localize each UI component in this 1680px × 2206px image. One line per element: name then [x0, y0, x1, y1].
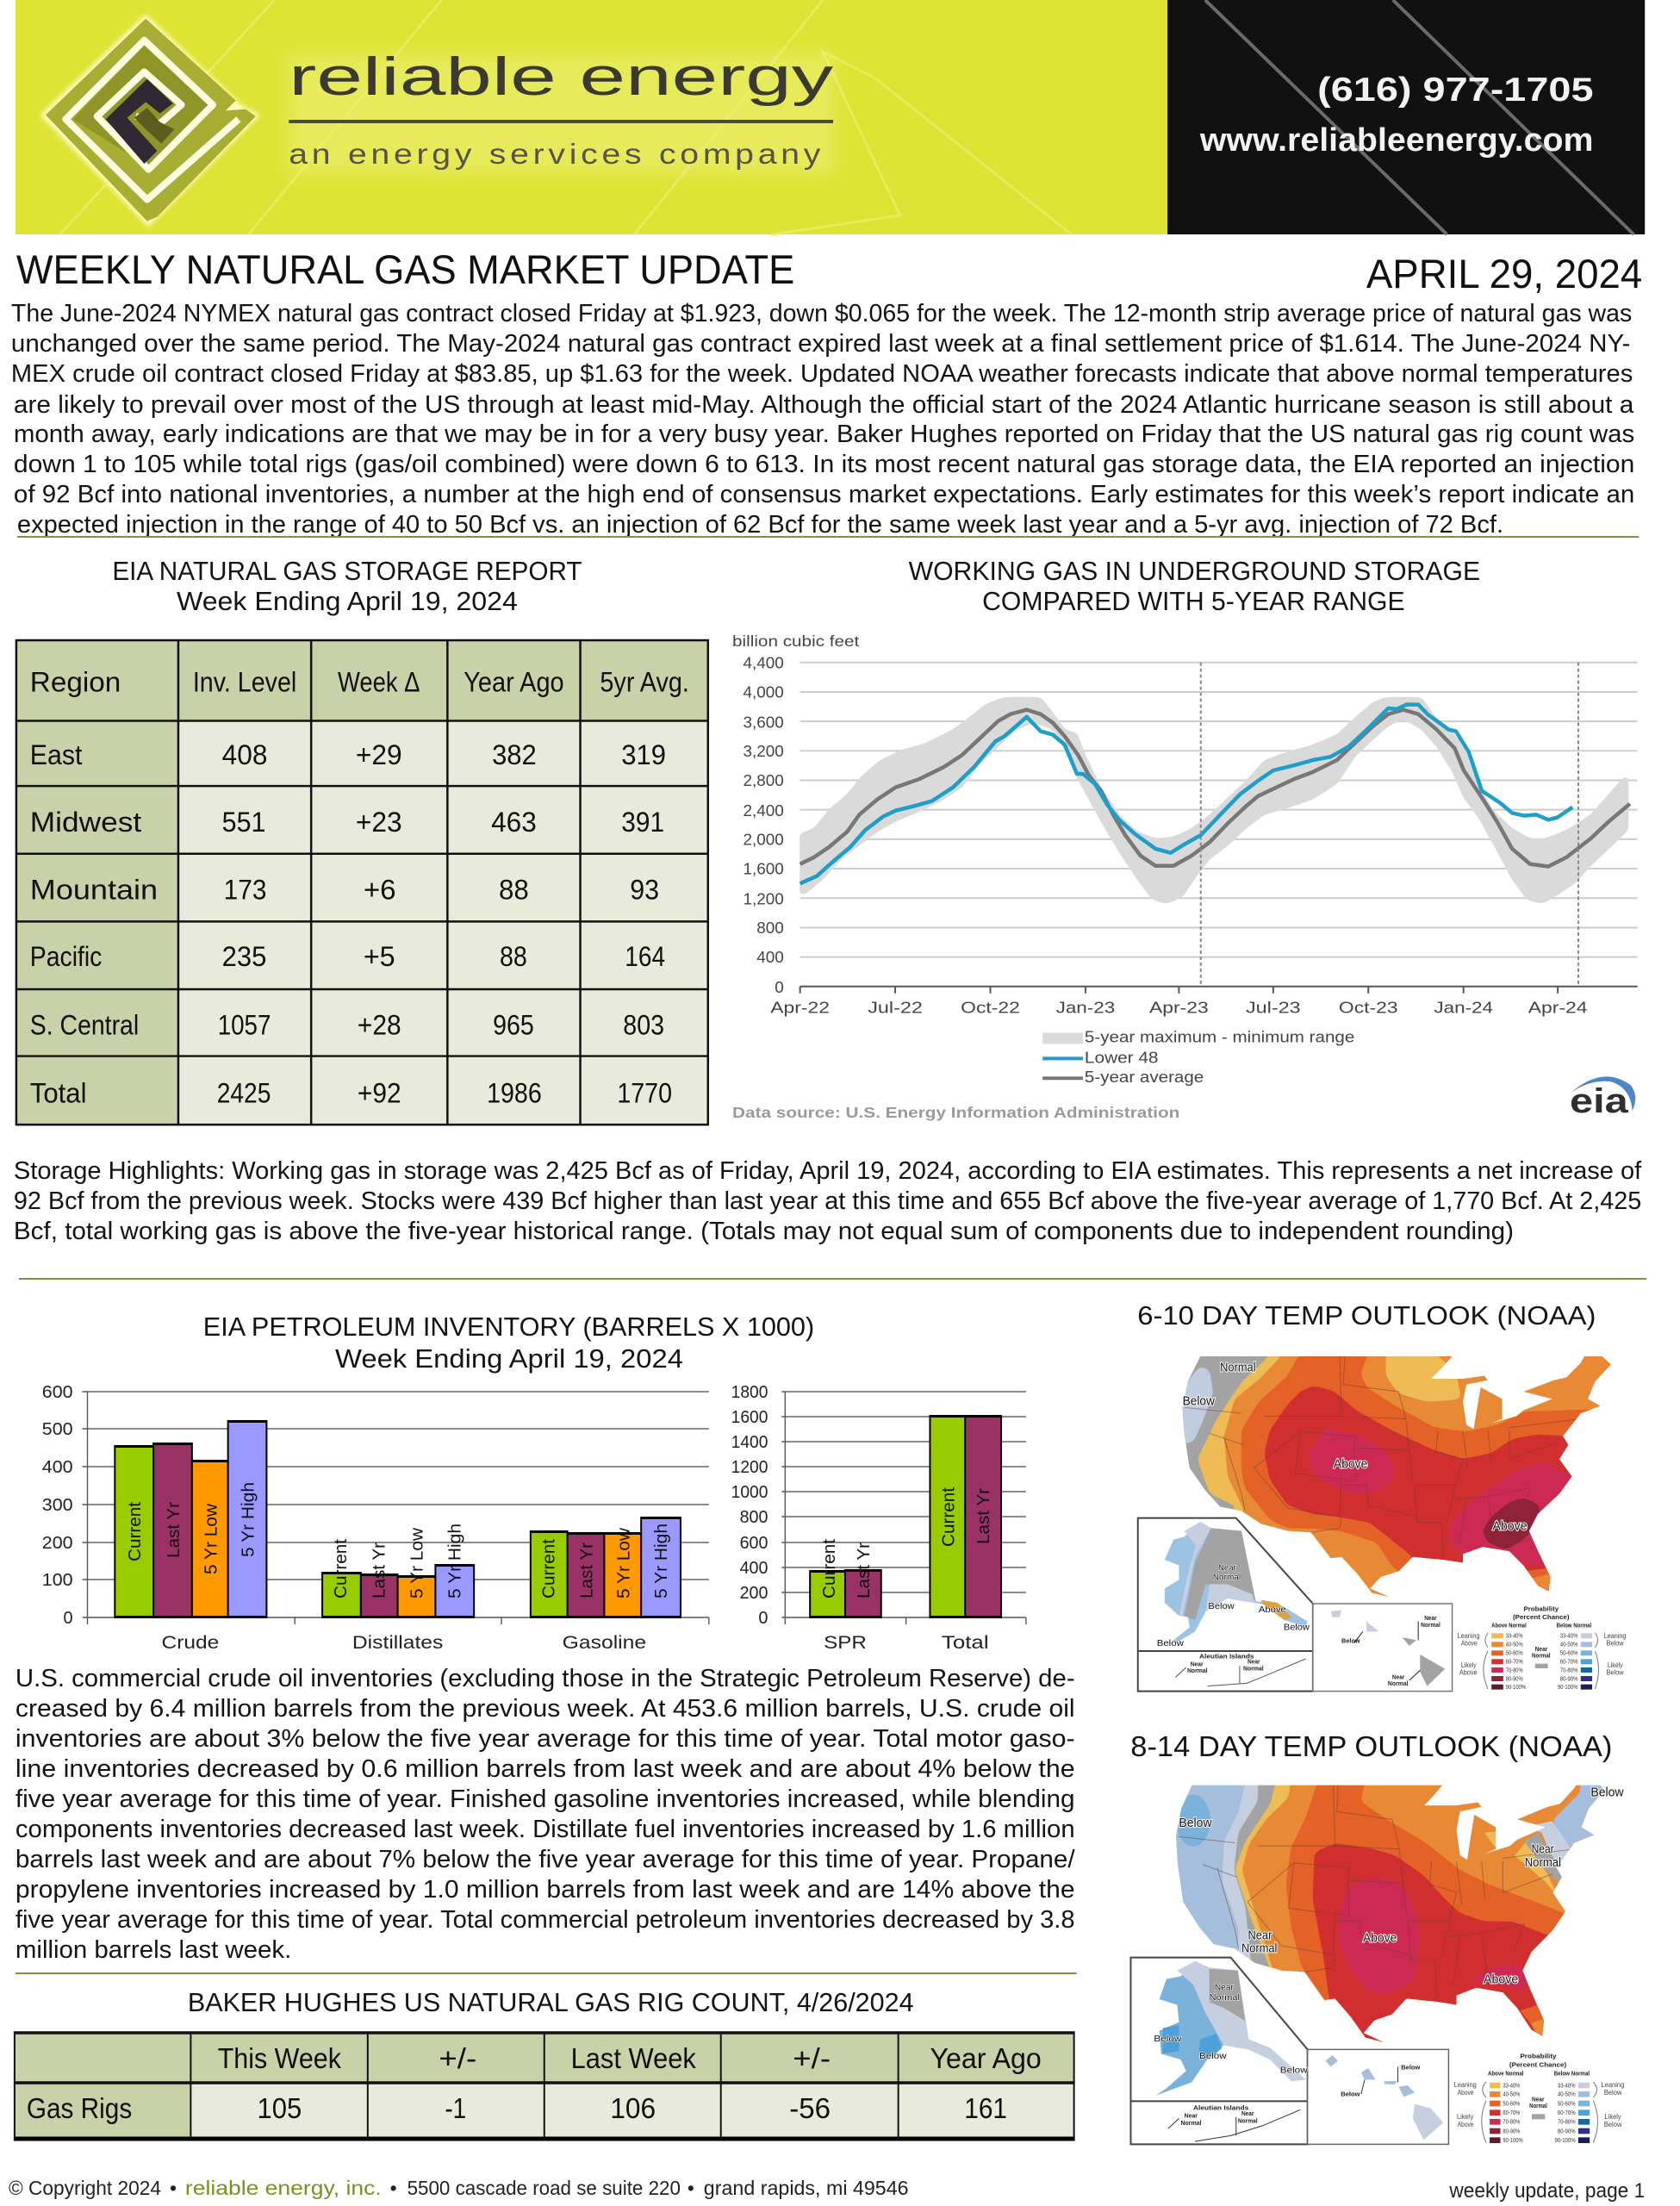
probability legend: 90-100%	[1555, 2137, 1576, 2144]
legend: Lower 48	[1085, 1049, 1159, 1067]
bar chart: SPR and total: 1000	[731, 1483, 768, 1502]
probability legend: Above	[1458, 2088, 1473, 2097]
heading: 8-14 day outlook: 8-14 DAY TEMP OUTLOOK (NOAA)	[1130, 1730, 1612, 1762]
category labels: SPR	[824, 1633, 867, 1653]
probability legend: Below	[1604, 2088, 1622, 2097]
table: EIA storage report: East	[30, 738, 83, 770]
bar chart: crude, distillates, gasoline: 0	[64, 1609, 73, 1628]
petroleum commentary text	[16, 1665, 1076, 1964]
market summary text block: are likely to prevail over most of the US through at least mid-May. Although the official start of the 2024 Atlantic hurricane season is still about a	[14, 391, 1634, 419]
SPR bars	[810, 1539, 881, 1618]
probability legend: 50-60%	[1558, 2100, 1576, 2107]
table: EIA storage report: 173	[224, 873, 266, 905]
footer: page number: weekly update, page 1	[1448, 2179, 1645, 2203]
map region labels: Normal	[1525, 1855, 1561, 1870]
bar chart: crude, distillates, gasoline: 300	[42, 1496, 73, 1515]
Lower 48 line	[800, 705, 1572, 883]
probability legend: Leaning	[1604, 1631, 1626, 1640]
bar chart: SPR and total	[731, 1383, 1026, 1653]
x axis labels: Jan-24	[1434, 1000, 1493, 1018]
probability legend: Likely	[1461, 1661, 1477, 1669]
Alaska inset: Near	[1215, 1983, 1234, 1992]
footer: copyright and address: reliable energy, inc.	[185, 2177, 382, 2199]
contiguous US temperature regions	[1176, 1785, 1604, 2042]
phone number: (616) 977-1705	[1317, 72, 1594, 109]
category labels: Total	[942, 1633, 989, 1653]
table: rig count	[14, 2032, 1075, 2140]
market summary text block: MEX crude oil contract closed Friday at $83.85, up $1.63 for the week. Updated NOAA weather forecasts indicate that above normal temperatures	[11, 360, 1633, 388]
title: WEEKLY NATURAL GAS MARKET UPDATE	[16, 247, 794, 292]
Alaska inset: Normal	[1388, 1680, 1409, 1687]
distillates bars: 5 Yr Low	[408, 1527, 426, 1598]
y axis labels: 4,000	[743, 684, 784, 702]
total bars: Last Yr	[974, 1488, 993, 1544]
probability legend: 70-80%	[1506, 1667, 1523, 1673]
footer: copyright and address: •	[390, 2177, 397, 2199]
map: 8-14 day temperature outlook	[1130, 1775, 1627, 2144]
table: EIA storage report: 5yr Avg.	[600, 666, 689, 698]
table: EIA storage report: 551	[222, 806, 265, 838]
petroleum commentary text: propylene inventories increased by 1.0 million barrels from last week and are 14% above the	[16, 1876, 1075, 1904]
y axis labels: 3,200	[743, 743, 784, 761]
petroleum commentary text: five year average for this time of year. Total commercial petroleum inventories decreased by 3.8	[16, 1906, 1075, 1934]
Alaska inset: Near	[1392, 1673, 1405, 1680]
map region labels: Below	[1179, 1816, 1212, 1830]
Alaska inset: Below	[1341, 1637, 1360, 1644]
map region labels	[1183, 1360, 1528, 1533]
probability legend: Leaning	[1454, 2080, 1477, 2089]
probability legend: Below	[1607, 1667, 1624, 1676]
probability legend: Below Normal	[1554, 2070, 1590, 2077]
bar chart: crude, distillates, gasoline: 500	[42, 1420, 73, 1439]
table: rig count: 161	[964, 2092, 1007, 2124]
crude bars: Current	[126, 1502, 145, 1561]
footer: copyright and address: •	[688, 2177, 694, 2199]
y axis labels: 0	[775, 979, 784, 997]
table: EIA storage report: 408	[222, 738, 267, 770]
map region labels: Above	[1363, 1930, 1397, 1945]
Alaska inset: Normal	[1187, 1667, 1208, 1674]
total bars	[930, 1415, 1001, 1618]
probability legend: 70-80%	[1503, 2118, 1520, 2125]
5-year average line	[800, 710, 1630, 867]
table: EIA storage report: Pacific	[30, 940, 102, 972]
category labels	[162, 1633, 646, 1653]
table: EIA storage report: +92	[358, 1076, 401, 1108]
header banner	[16, 0, 1645, 234]
y axis labels: 4,400	[743, 655, 784, 673]
probability legend: 60-70%	[1503, 2109, 1520, 2116]
probability legend: 33-40%	[1503, 2082, 1520, 2089]
Alaska inset: Normal	[1243, 1665, 1264, 1672]
legend: 5-year average	[1085, 1069, 1204, 1087]
map region labels: Normal	[1241, 1941, 1277, 1955]
Alaska inset: Above	[1259, 1605, 1286, 1615]
table: EIA storage report: 88	[500, 940, 527, 972]
probability legend: 60-70%	[1560, 1658, 1577, 1665]
y axis labels: 2,800	[743, 772, 784, 790]
website: www.reliableenergy.com	[1199, 122, 1594, 159]
contiguous US temperature regions	[1182, 1356, 1611, 1598]
map region labels: Normal	[1220, 1360, 1256, 1374]
heading: working gas chart: COMPARED WITH 5-YEAR RANGE	[982, 586, 1405, 616]
probability legend: 40-50%	[1558, 2091, 1576, 2097]
category labels	[824, 1633, 989, 1653]
table: EIA storage report: +28	[358, 1009, 401, 1041]
storage highlights text: Bcf, total working gas is above the five-year historical range. (Totals may not equal sum of components due to independent rounding)	[14, 1218, 1514, 1245]
data source note: Data source: U.S. Energy Information Administration	[732, 1104, 1179, 1121]
petroleum commentary text: inventories are about 3% below the five year average for this time of year. Total motor gaso-	[16, 1725, 1075, 1753]
bar chart: SPR and total: 1600	[731, 1408, 768, 1427]
table: rig count: 106	[610, 2092, 656, 2124]
Alaska inset: Below	[1341, 2091, 1360, 2097]
bar chart: crude, distillates, gasoline: 200	[42, 1534, 73, 1553]
storage highlights text	[14, 1157, 1642, 1245]
map region labels: Above	[1492, 1518, 1528, 1533]
probability legend: Probability	[1523, 1605, 1559, 1612]
market summary text block: month away, early indications are that we may be in for a very busy year. Baker Hughes reported on Friday that the US natural gas rig count was	[14, 421, 1634, 448]
probability legend: Above Normal	[1488, 2070, 1523, 2077]
table: EIA storage report: 803	[623, 1009, 664, 1041]
Alaska inset: Normal	[1213, 1573, 1241, 1582]
table: EIA storage report: 965	[493, 1009, 534, 1041]
market summary text block: unchanged over the same period. The May-2024 natural gas contract expired last week at a final settlement price of $1.614. The June-2024 NY-	[11, 330, 1630, 358]
Alaska inset: Near	[1218, 1563, 1236, 1573]
heading: storage report: EIA NATURAL GAS STORAGE REPORT	[112, 556, 582, 586]
market summary text block: down 1 to 105 while total rigs (gas/oil combined) were down 6 to 613. In its most recent natural gas storage data, the EIA reported an injection	[14, 451, 1634, 478]
total bars: Current	[939, 1487, 958, 1547]
probability legend: 40-50%	[1503, 2091, 1520, 2097]
heading: petroleum inventory: EIA PETROLEUM INVENTORY (BARRELS X 1000)	[203, 1312, 814, 1342]
probability legend: Normal	[1532, 1652, 1551, 1659]
market summary text block	[11, 300, 1634, 539]
crude bars	[115, 1420, 266, 1618]
crude bars: 5 Yr High	[240, 1482, 258, 1557]
bar chart: SPR and total: 1200	[731, 1458, 768, 1477]
probability legend: Near	[1532, 2096, 1545, 2103]
bar chart: crude, distillates, gasoline	[42, 1383, 709, 1653]
gasoline bars: Current	[540, 1539, 559, 1598]
y axis labels: 3,600	[743, 714, 784, 732]
x axis labels: Apr-23	[1149, 1000, 1209, 1018]
heading: petroleum inventory: Week Ending April 19, 2024	[335, 1343, 683, 1374]
petroleum commentary text: five year average for this time of year. Finished gasoline inventories increased, while blending	[16, 1785, 1075, 1813]
probability legend: 90-100%	[1558, 1684, 1577, 1691]
Alaska inset: Normal	[1181, 2120, 1202, 2127]
footer: copyright and address: •	[170, 2177, 177, 2199]
distillates bars: 5 Yr High	[445, 1524, 464, 1598]
probability legend: Below Normal	[1557, 1622, 1591, 1629]
Alaska inset: Near	[1241, 2110, 1254, 2117]
probability legend: 90-100%	[1506, 1684, 1526, 1691]
bar chart: SPR and total: 800	[740, 1508, 768, 1527]
icon: reliable energy logo	[40, 15, 260, 227]
Alaska inset: Below	[1280, 2066, 1308, 2075]
Alaska inset	[1130, 1958, 1448, 2144]
table: EIA storage report: 463	[491, 806, 537, 838]
probability legend: Leaning	[1458, 1631, 1479, 1640]
table: EIA storage report: +23	[356, 806, 402, 838]
probability legend: 50-60%	[1503, 2100, 1520, 2107]
probability legend: Below	[1607, 1638, 1624, 1647]
map region labels: Below	[1590, 1785, 1624, 1799]
footer: copyright and address: 5500 cascade road se suite 220	[408, 2177, 681, 2199]
heading: storage report: Week Ending April 19, 2024	[177, 586, 518, 616]
footer: copyright and address	[9, 2177, 909, 2199]
Alaska inset: Below	[1157, 1639, 1184, 1648]
heading: 6-10 day outlook: 6-10 DAY TEMP OUTLOOK (NOAA)	[1137, 1300, 1596, 1330]
Alaska inset: Normal	[1238, 2117, 1258, 2124]
probability legend: 80-90%	[1560, 1675, 1577, 1682]
table: EIA storage report: Year Ago	[464, 666, 564, 698]
Alaska inset: Below	[1154, 2035, 1181, 2044]
map region labels: Above	[1334, 1456, 1367, 1471]
table: EIA storage report: Region	[30, 666, 121, 698]
table: rig count: -56	[789, 2092, 831, 2124]
petroleum commentary text: components inventories decreased last week. Distillate fuel inventories increased by 1.6 million	[16, 1816, 1075, 1843]
table: EIA storage report: 319	[621, 738, 666, 770]
bar chart: SPR and total: 400	[740, 1559, 768, 1578]
probability legend: 70-80%	[1558, 2118, 1576, 2125]
logo rule	[289, 120, 833, 123]
table: EIA storage report: 235	[222, 940, 266, 972]
table: EIA storage report	[16, 639, 709, 1125]
Alaska inset: Normal	[1210, 1993, 1240, 2003]
Alaska inset: Aleutian Islands	[1193, 2104, 1249, 2111]
probability legend: Near	[1535, 1646, 1548, 1653]
table: EIA storage report: 88	[499, 873, 529, 905]
x axis labels: Apr-22	[770, 1000, 830, 1018]
Alaska inset: Below	[1284, 1623, 1310, 1632]
probability legend: Likely	[1605, 2112, 1621, 2121]
map: 6-10 day temperature outlook	[1138, 1344, 1627, 1692]
footer: copyright and address: © Copyright 2024	[9, 2177, 161, 2199]
heading: petroleum inventory	[203, 1312, 814, 1374]
table: EIA storage report: +5	[364, 940, 395, 972]
Alaska inset: Normal	[1421, 1622, 1440, 1629]
bar chart: SPR and total: 600	[740, 1534, 768, 1553]
probability legend	[1454, 2053, 1624, 2144]
probability legend: 50-60%	[1506, 1649, 1523, 1656]
y axis labels: 2,400	[743, 802, 784, 820]
distillates bars: Current	[332, 1539, 351, 1598]
Alaska inset: Below	[1401, 2064, 1421, 2071]
SPR bars: Current	[820, 1539, 839, 1598]
table: EIA storage report: Week Δ	[338, 666, 420, 698]
table: EIA storage report: +29	[356, 738, 402, 770]
probability legend: Probability	[1520, 2053, 1557, 2060]
date: APRIL 29, 2024	[1366, 252, 1642, 296]
market summary text block: The June-2024 NYMEX natural gas contract closed Friday at $1.923, down $0.065 for the week. The 12-month strip average price of natural gas was	[11, 300, 1632, 327]
probability legend: Above	[1458, 2120, 1473, 2128]
bar chart: SPR and total: 0	[758, 1609, 768, 1628]
table: rig count: +/-	[439, 2042, 476, 2074]
table: EIA storage report: 93	[630, 873, 659, 905]
probability legend: 70-80%	[1560, 1667, 1577, 1673]
table: EIA storage report: 382	[492, 738, 537, 770]
probability legend: Above	[1459, 1667, 1478, 1676]
probability legend: 80-90%	[1506, 1675, 1523, 1682]
table: EIA storage report: Midwest	[30, 806, 141, 838]
market summary text block: expected injection in the range of 40 to 50 Bcf vs. an injection of 62 Bcf for the same week last year and a 5-yr avg. injection of 72 Bcf.	[17, 511, 1503, 539]
crude bars: Last Yr	[165, 1502, 184, 1558]
map region labels: Near	[1532, 1841, 1554, 1856]
storage highlights text: Storage Highlights: Working gas in storage was 2,425 Bcf as of Friday, April 19, 2024, according to EIA estimates. This represents a net increase of	[14, 1157, 1642, 1185]
y axis labels: 1,600	[743, 860, 784, 878]
distillates bars: Last Yr	[370, 1542, 389, 1598]
crude bars: 5 Yr Low	[202, 1503, 221, 1574]
table: rig count: 105	[257, 2092, 302, 2124]
table: rig count: Year Ago	[930, 2042, 1042, 2074]
gasoline bars: Last Yr	[578, 1542, 596, 1598]
map region labels: Near	[1248, 1928, 1272, 1942]
footer: copyright and address: grand rapids, mi 49546	[704, 2177, 909, 2199]
map region labels: Below	[1183, 1393, 1215, 1408]
Alaska inset: Near	[1248, 1658, 1260, 1665]
5-year range band	[800, 697, 1628, 904]
x axis labels: Jan-23	[1056, 1000, 1115, 1018]
gasoline bars	[531, 1517, 681, 1618]
probability legend: (Percent Chance)	[1509, 2061, 1566, 2068]
probability legend: Likely	[1457, 2112, 1474, 2121]
logo tagline: an energy services company	[289, 138, 824, 170]
y axis labels: 400	[756, 949, 784, 967]
petroleum commentary text: creased by 6.4 million barrels from the previous week. At 453.6 million barrels, U.S. crude oil	[16, 1695, 1075, 1723]
table: EIA storage report: 391	[621, 806, 664, 838]
y axis unit label: billion cubic feet	[732, 633, 859, 650]
probability legend: Normal	[1529, 2103, 1547, 2109]
map region labels	[1179, 1785, 1624, 1986]
table: rig count: +/-	[793, 2042, 831, 2074]
probability legend: 40-50%	[1560, 1641, 1577, 1648]
Alaska inset: Near	[1191, 1661, 1204, 1667]
probability legend: 80-90%	[1503, 2128, 1520, 2134]
SPR bars: Last Yr	[855, 1542, 874, 1598]
category labels: Gasoline	[563, 1633, 646, 1653]
table: EIA storage report: Mountain	[30, 873, 158, 905]
gasoline bars: 5 Yr Low	[614, 1527, 633, 1598]
probability legend: 33-40%	[1558, 2082, 1576, 2089]
petroleum commentary text: line inventories decreased by 0.6 million barrels from last week and are about 4% below the	[16, 1755, 1075, 1783]
table: rig count: Last Week	[571, 2042, 696, 2074]
table: EIA storage report: 1986	[487, 1076, 542, 1108]
legend	[1042, 1028, 1354, 1087]
icon: eia logo: eia	[1570, 1082, 1629, 1120]
heading: working gas chart: WORKING GAS IN UNDERGROUND STORAGE	[909, 556, 1480, 586]
logo wordmark: reliable energy	[289, 47, 833, 107]
probability legend: (Percent Chance)	[1513, 1614, 1570, 1621]
heading: rig count: BAKER HUGHES US NATURAL GAS RIG COUNT, 4/26/2024	[188, 1987, 914, 2017]
map region labels: Above	[1484, 1972, 1518, 1986]
table: EIA storage report: 1057	[218, 1009, 271, 1041]
Alaska inset: Below	[1199, 2052, 1227, 2061]
Alaska inset: Below	[1208, 1602, 1235, 1611]
bar chart: SPR and total: 1800	[731, 1383, 768, 1402]
Alaska inset: Near	[1424, 1615, 1437, 1622]
y axis labels: 1,200	[743, 890, 784, 908]
table: EIA storage report: Inv. Level	[193, 666, 296, 698]
bar chart: SPR and total: 1400	[731, 1433, 768, 1452]
category labels: Distillates	[352, 1633, 443, 1653]
icon: eia logo	[1570, 1076, 1635, 1120]
bar chart: crude, distillates, gasoline: 400	[42, 1458, 73, 1477]
table: EIA storage report: S. Central	[30, 1009, 139, 1041]
probability legend	[1458, 1605, 1626, 1691]
x axis labels	[770, 1000, 1587, 1018]
Alaska inset	[1138, 1518, 1453, 1692]
probability legend: 33-40%	[1560, 1632, 1577, 1639]
probability legend: 60-70%	[1506, 1658, 1523, 1665]
Alaska inset: Near	[1185, 2112, 1198, 2119]
probability legend: 50-60%	[1560, 1649, 1577, 1656]
probability legend: 80-90%	[1558, 2128, 1576, 2134]
distillates bars	[322, 1524, 474, 1618]
table: EIA storage report: 1770	[617, 1076, 672, 1108]
x axis labels: Oct-23	[1339, 1000, 1398, 1018]
x axis labels: Jul-23	[1246, 1000, 1301, 1018]
petroleum commentary text: barrels last week and are about 7% below the five year average for this time of year. Propane/	[16, 1846, 1076, 1873]
category labels: Crude	[162, 1633, 219, 1653]
market summary text block: of 92 Bcf into national inventories, a number at the high end of consensus market expectations. Early estimates for this week’s report indicate an	[14, 481, 1634, 508]
probability legend: 60-70%	[1558, 2109, 1576, 2116]
y axis labels: 800	[756, 919, 784, 938]
x axis labels: Apr-24	[1528, 1000, 1587, 1018]
probability legend: Likely	[1608, 1661, 1623, 1669]
y axis labels: 2,000	[743, 832, 784, 850]
probability legend: Below	[1604, 2120, 1622, 2128]
heading: storage report	[112, 556, 582, 616]
petroleum commentary text: million barrels last week.	[16, 1936, 291, 1964]
y axis labels	[743, 655, 784, 997]
probability legend: Above Normal	[1491, 1622, 1527, 1629]
probability legend: Above	[1461, 1638, 1478, 1647]
chart: working gas in underground storage	[732, 633, 1638, 1121]
bar chart: crude, distillates, gasoline: 600	[42, 1383, 73, 1402]
table: EIA storage report: +6	[364, 873, 396, 905]
bar chart: crude, distillates, gasoline: 100	[42, 1571, 73, 1590]
heading: working gas chart	[909, 556, 1480, 616]
probability legend: Leaning	[1601, 2080, 1624, 2089]
table: EIA storage report: 164	[625, 940, 665, 972]
table: EIA storage report: Total	[30, 1076, 86, 1108]
bar chart: SPR and total: 200	[740, 1584, 768, 1603]
x axis labels: Jul-22	[868, 1000, 923, 1018]
table: rig count: This Week	[218, 2042, 341, 2074]
probability legend: 90-100%	[1503, 2137, 1523, 2144]
x axis labels: Oct-22	[961, 1000, 1020, 1018]
table: rig count: -1	[445, 2092, 466, 2124]
table: rig count: Gas Rigs	[27, 2092, 132, 2124]
probability legend: 40-50%	[1506, 1641, 1523, 1648]
legend: 5-year maximum - minimum range	[1085, 1028, 1354, 1046]
storage highlights text: 92 Bcf from the previous week. Stocks were 439 Bcf higher than last year at this time and 655 Bcf above the five-year average of 1,770 Bcf. At 2,425	[14, 1187, 1641, 1215]
gasoline bars: 5 Yr High	[652, 1524, 671, 1598]
Alaska inset: Aleutian Islands	[1199, 1653, 1254, 1660]
probability legend: 33-40%	[1506, 1632, 1523, 1639]
table: EIA storage report: 2425	[217, 1076, 271, 1108]
petroleum commentary text: U.S. commercial crude oil inventories (excluding those in the Strategic Petroleum Reserve) de-	[16, 1665, 1075, 1692]
